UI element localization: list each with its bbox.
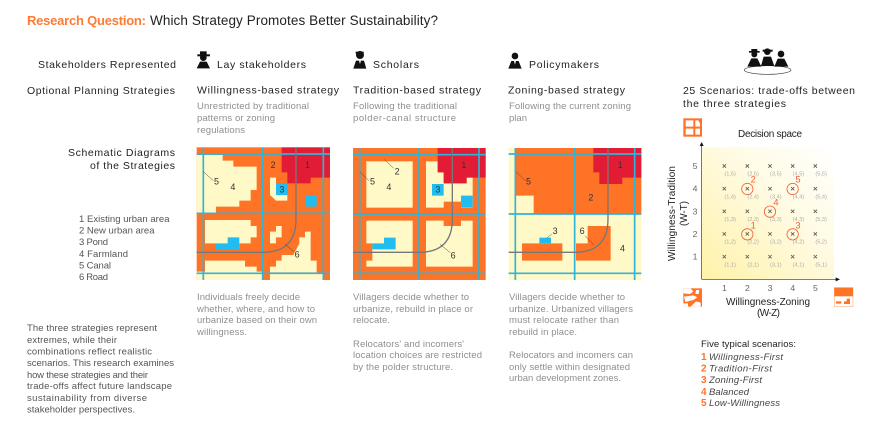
list: five typical scenarios: Low-Willingness: [709, 398, 780, 409]
highlighted scenarios: 2: [751, 175, 756, 185]
scenario grid: (2,2): [747, 240, 759, 246]
map: zoning-based: 4: [620, 244, 625, 254]
text: tradition process: urbanize, rebuild in place or: [353, 304, 473, 315]
scenario grid: (5,1): [815, 262, 827, 268]
list: five typical scenarios: 4: [701, 387, 707, 398]
legend: 1 Existing urban area: [79, 214, 170, 225]
strategy description: willingness: [197, 101, 309, 136]
legend: [79, 214, 170, 283]
scenario grid: (1,4): [724, 194, 736, 200]
list: five typical scenarios: Five typical scenarios:: [701, 339, 796, 350]
text: tradition process: location choices are restricted: [353, 350, 482, 361]
text: willingness process: willingness.: [196, 327, 247, 338]
strategy description: tradition: polder-canal structure: [353, 113, 456, 124]
strategy heading: tradition: Tradition-based strategy: [353, 84, 482, 96]
scenario grid: (3,4): [770, 194, 782, 200]
strategy description: willingness: Unrestricted by traditional: [197, 101, 309, 112]
row label: schematic diagrams: Schematic Diagrams: [68, 147, 175, 159]
strategy description: willingness: patterns or zoning: [197, 113, 275, 124]
axis tick labels: [693, 161, 818, 293]
map: zoning-based: 2: [588, 193, 593, 203]
icon: three stakeholders group: [744, 48, 791, 74]
icon: scholar: [353, 51, 366, 69]
scenario grid: (4,1): [793, 262, 804, 268]
text: zoning process: rebuild in place.: [509, 327, 577, 338]
scenario grid: (5,5): [815, 172, 827, 178]
scenario grid: (3,5): [770, 172, 782, 178]
scenario grid: [723, 164, 827, 268]
x axis label: (W-Z): [757, 308, 780, 319]
scenario grid: (4,3): [793, 217, 804, 223]
scenario grid: (4,2): [793, 240, 804, 246]
row label: optional planning strategies: Optional Planning Strategies: [27, 85, 175, 97]
strategy description: tradition: [353, 101, 457, 124]
map: tradition-based: [353, 148, 486, 280]
heading: lay stakeholders: Lay stakeholders: [217, 59, 306, 71]
axis tick labels: 4: [693, 184, 698, 194]
axis tick labels: 1: [722, 283, 727, 293]
strategy heading: zoning: Zoning-based strategy: [508, 84, 626, 96]
list: five typical scenarios: 2: [701, 364, 707, 374]
strategy description: zoning: [509, 101, 631, 124]
map: tradition-based: 1: [461, 160, 466, 170]
text: willingness process: whether, where, and how to: [196, 304, 315, 315]
legend: 4 Farmland: [79, 249, 128, 260]
scenario grid: (2,4): [747, 194, 759, 200]
icon: willingness mini map: [683, 288, 702, 307]
map: zoning-based: [509, 148, 641, 280]
y axis label: Willingness-Tradition: [667, 166, 678, 261]
scenario grid: (4,4): [793, 194, 804, 200]
left paragraph: extremes, while their: [27, 335, 117, 346]
text: zoning process: [509, 292, 633, 384]
map: zoning-based: 5: [526, 176, 531, 186]
text: zoning process: only settle within designated: [509, 362, 630, 373]
scenario grid: (1,2): [724, 240, 736, 246]
y axis label: (W-T): [679, 201, 690, 226]
scenario grid: (2,1): [747, 262, 759, 268]
legend: 2 New urban area: [79, 226, 155, 236]
row label: schematic diagrams: of the Strategies: [90, 160, 175, 172]
text: tradition process: Relocators' and incomers': [353, 339, 464, 350]
title: Which Strategy Promotes Better Sustainability?: [150, 13, 438, 28]
map: zoning-based: 1: [618, 160, 623, 170]
map: willingness-based: 3: [279, 185, 284, 195]
title: Research Question:: [27, 13, 146, 28]
strategy description: willingness: regulations: [197, 125, 245, 136]
text: zoning process: Relocators and incomers can: [509, 350, 633, 361]
axis tick labels: 1: [693, 252, 698, 262]
map: tradition-based: 4: [386, 182, 391, 192]
heading: 25 scenarios: 25 Scenarios: trade-offs between: [683, 85, 855, 97]
list: five typical scenarios: Balanced: [709, 387, 750, 398]
chart: decision space scatter: [683, 118, 853, 307]
y axis label: [667, 166, 690, 261]
left paragraph: trade-offs affect future landscape: [27, 381, 172, 392]
list: five typical scenarios: 3: [701, 375, 707, 386]
heading: scholars: Scholars: [373, 59, 419, 71]
text: tradition process: Villagers decide whether to: [353, 292, 469, 303]
scenario grid: (1,3): [724, 217, 736, 223]
map: tradition-based: 5: [370, 176, 375, 186]
highlighted scenarios: 3: [795, 220, 801, 230]
list: five typical scenarios: Zoning-First: [708, 375, 762, 386]
left paragraph: scenarios. This research examines: [27, 358, 174, 369]
text: tradition process: by the polder structure.: [353, 362, 453, 373]
icon: policymaker: [508, 53, 522, 69]
text: zoning process: must relocate rather than: [509, 315, 619, 326]
legend: 6 Road: [79, 272, 108, 283]
strategy description: tradition: Following the traditional: [353, 101, 457, 112]
list: five typical scenarios: Tradition-First: [709, 364, 772, 374]
row label: stakeholders represented: Stakeholders Represented: [38, 59, 176, 71]
text: willingness process: [196, 292, 317, 338]
map: willingness-based: 2: [271, 160, 276, 170]
legend: 3 Pond: [79, 237, 108, 248]
scenario grid: (4,5): [793, 172, 804, 178]
scenario grid: (2,3): [747, 217, 759, 223]
scenario grid: (1,1): [724, 262, 736, 268]
heading: 25 scenarios: [683, 85, 855, 110]
strategy heading: willingness: Willingness-based strategy: [197, 84, 340, 96]
scenario grid: (1,5): [724, 172, 736, 178]
axis tick labels: 2: [745, 283, 750, 293]
row label: schematic diagrams: [68, 147, 175, 172]
left paragraph: [27, 323, 174, 416]
x axis label: [726, 297, 810, 319]
axes: [700, 142, 840, 281]
left paragraph: The three strategies represent: [27, 323, 157, 334]
axis tick labels: 3: [693, 206, 698, 216]
x axis label: Willingness-Zoning: [726, 297, 810, 308]
map: willingness-based: 5: [214, 176, 219, 186]
list: five typical scenarios: [701, 339, 796, 409]
scenario grid: (3,1): [770, 262, 782, 268]
scenario grid: (3,2): [770, 240, 782, 246]
left paragraph: how these strategies and their: [27, 370, 148, 381]
map: willingness-based: 6: [295, 250, 300, 260]
chart title: decision space: Decision space: [738, 129, 802, 140]
map: tradition-based: 3: [435, 185, 440, 195]
highlighted scenarios: 5: [795, 175, 801, 185]
left paragraph: sustainability from diverse: [27, 393, 147, 404]
strategy description: zoning: Following the current zoning: [509, 101, 631, 112]
legend: 5 Canal: [79, 260, 111, 272]
map: willingness-based: [197, 147, 330, 280]
heading: policymakers: Policymakers: [529, 59, 599, 71]
icon: lay stakeholder: [197, 51, 210, 68]
scenario grid: (5,3): [815, 217, 827, 223]
text: tradition process: relocate.: [353, 315, 390, 326]
highlighted scenarios: 4: [773, 198, 779, 208]
axis tick labels: 5: [813, 283, 818, 293]
text: willingness process: Individuals freely decide: [197, 292, 300, 303]
scenario grid: (3,3): [770, 217, 782, 223]
map: tradition-based: 2: [395, 166, 400, 176]
axis tick labels: 2: [693, 229, 698, 239]
left paragraph: combinations reflect realistic: [27, 346, 152, 358]
heading: 25 scenarios: the three strategies: [683, 98, 786, 110]
map: zoning-based: 3: [553, 226, 558, 236]
axis tick labels: 4: [790, 283, 795, 293]
text: willingness process: urbanize based on their own: [197, 315, 317, 326]
icon: zoning mini map: [834, 288, 853, 307]
axis tick labels: 3: [768, 283, 773, 293]
highlighted scenarios: [742, 175, 801, 240]
scenario grid: (5,4): [815, 194, 827, 200]
list: five typical scenarios: Willingness-First: [709, 352, 783, 363]
icon: tradition mini map: [683, 118, 702, 137]
text: zoning process: urban development zones.: [509, 373, 621, 384]
map: willingness-based: 1: [305, 160, 310, 170]
highlighted scenarios: 1: [751, 220, 756, 230]
map: tradition-based: 6: [451, 250, 456, 260]
strategy description: zoning: plan: [509, 113, 527, 124]
list: five typical scenarios: 5: [701, 398, 707, 409]
map: zoning-based: 6: [580, 226, 585, 236]
scenario grid: (5,2): [815, 240, 827, 246]
left paragraph: stakeholder perspectives.: [27, 404, 135, 416]
text: zoning process: Villagers decide whether to: [509, 292, 625, 303]
text: zoning process: urbanize. Urbanized villagers: [509, 304, 633, 315]
axis tick labels: 5: [693, 161, 698, 171]
text: tradition process: [353, 292, 482, 373]
list: five typical scenarios: 1: [701, 352, 707, 363]
map: willingness-based: 4: [230, 182, 235, 192]
scenario grid: (2,5): [747, 172, 759, 178]
